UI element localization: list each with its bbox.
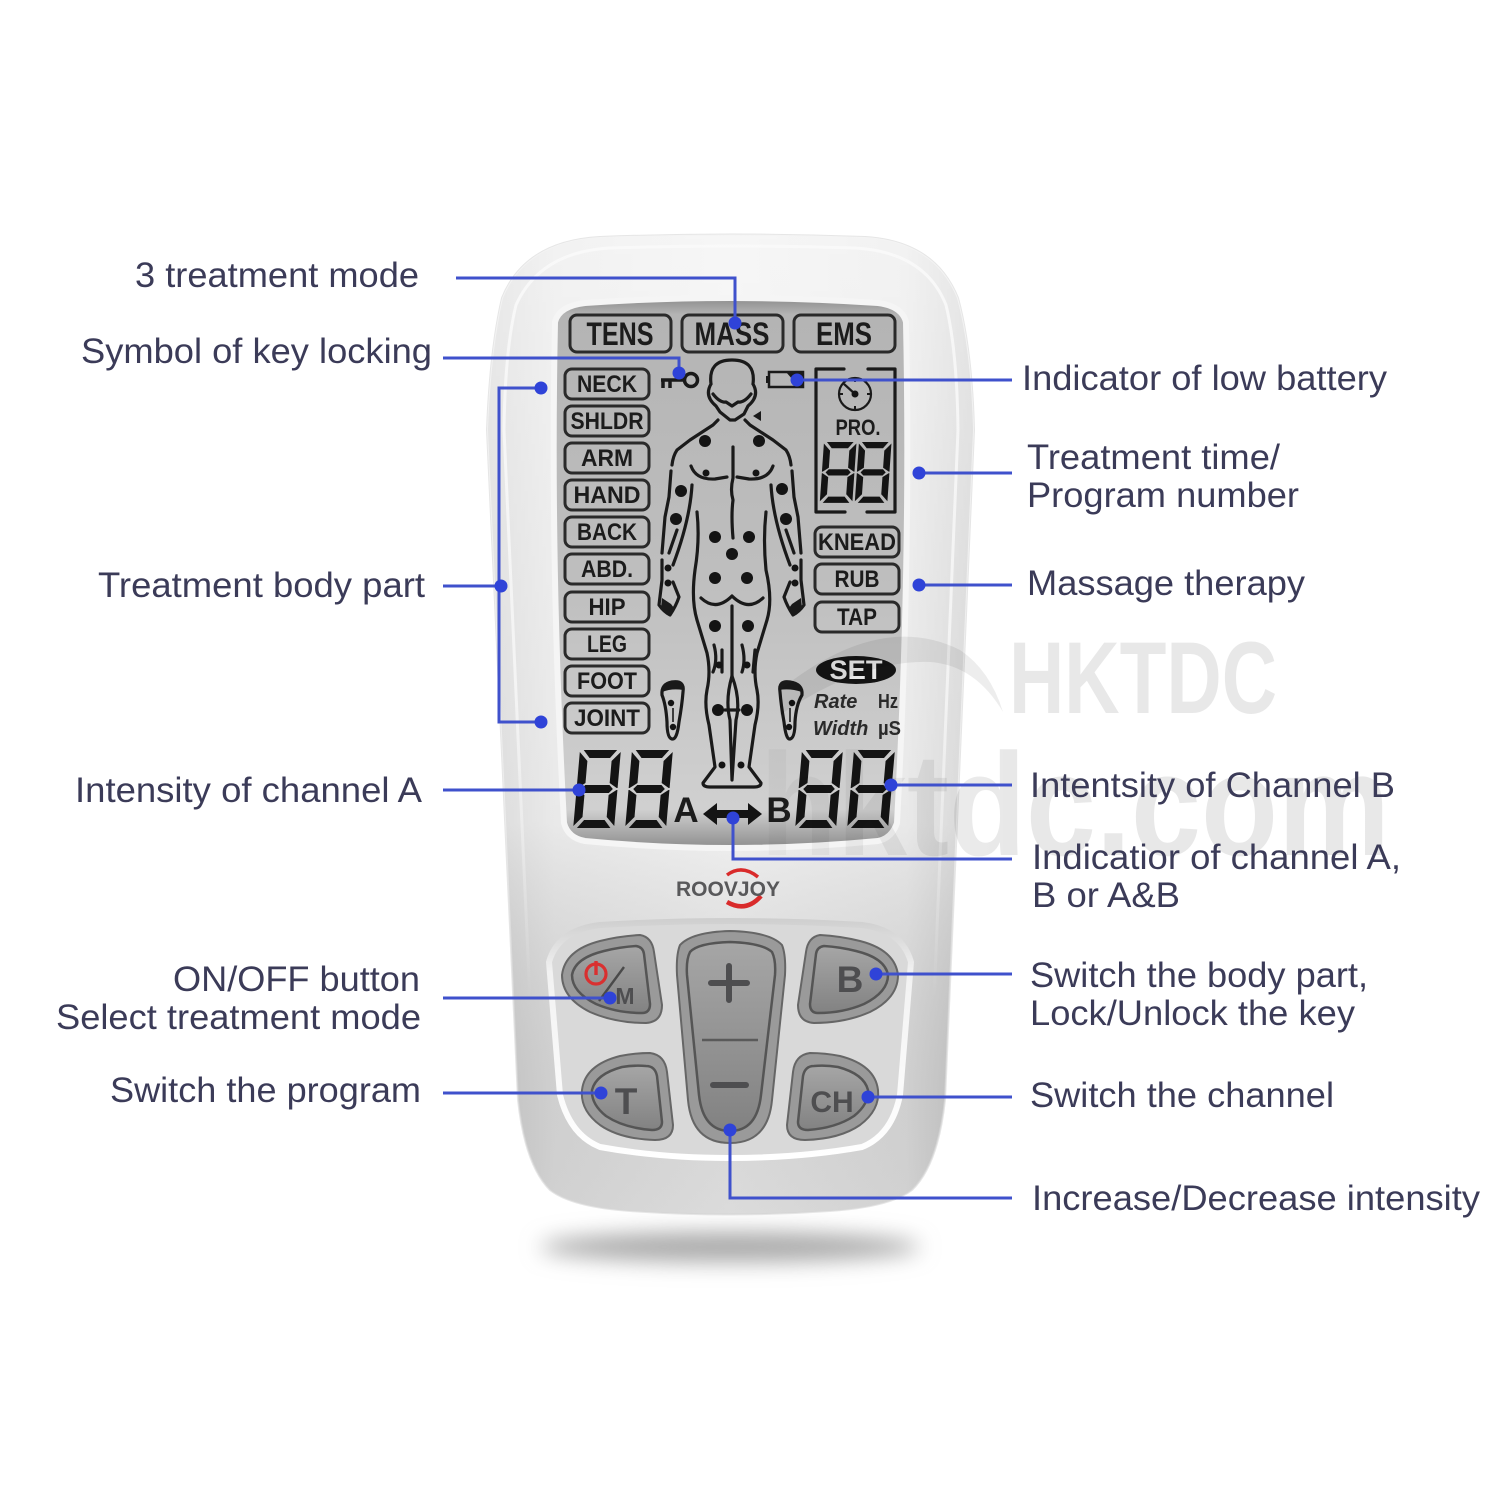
rate and width units: µS: [878, 718, 901, 740]
leader: body part bracket: [443, 382, 548, 728]
body part list: ABD.: [581, 556, 633, 583]
leader: channel indicator: [726, 812, 1012, 859]
leader: on off: [443, 992, 616, 1004]
button: CH: CH: [810, 1086, 854, 1119]
electrode dots: [664, 435, 798, 768]
massage list: KNEAD: [818, 529, 896, 556]
leader: body part button: [870, 968, 1012, 980]
button: power and mode: M: [615, 983, 635, 1009]
rate and width units: Hz: [878, 691, 898, 713]
label: low battery: Indicator of low battery: [1022, 359, 1388, 398]
brand logo: ROOVJOY: [676, 878, 780, 901]
icon: right foot: [779, 682, 802, 739]
mode boxes: MASS: [694, 316, 770, 352]
label: channel indicator: Indicatior of channel A,: [1032, 838, 1401, 877]
label: on off and select mode: ON/OFF button: [173, 960, 420, 999]
button: CH: [787, 1053, 878, 1140]
mode boxes: EMS: [816, 316, 872, 352]
leader: key locking: [443, 358, 686, 380]
label: 3 treatment mode: 3 treatment mode: [135, 256, 419, 295]
watermark: hktdc.com: [760, 723, 1390, 886]
button: B: B: [837, 959, 863, 1000]
label: channel indicator: B or A&B: [1032, 876, 1180, 915]
icon: left foot: [662, 682, 683, 739]
label: on off and select mode: Select treatment mode: [56, 998, 421, 1037]
button: power and mode: [562, 935, 662, 1023]
label: intensity of channel B: Intentsity of Channel B: [1030, 766, 1395, 805]
rate and width units: Rate: [814, 691, 857, 713]
button panel: [549, 921, 911, 1158]
channel indicator A arrow B: A: [673, 791, 699, 830]
leader: treatment time: [912, 466, 1012, 480]
timer bracket and clock: [816, 369, 895, 512]
channel B digits: [795, 750, 895, 828]
leader: switch program: [443, 1086, 608, 1100]
body part list: FOOT: [577, 668, 637, 695]
label: treatment time program number: Program number: [1027, 476, 1299, 515]
label: on off and select mode: [56, 960, 421, 1037]
body part list: JOINT: [574, 705, 640, 732]
body part list: HAND: [574, 482, 640, 509]
program digits: [820, 442, 892, 503]
label: switch the program: Switch the program: [110, 1071, 421, 1110]
label: treatment body part: Treatment body part: [98, 566, 425, 605]
timer bracket and clock: PRO.: [836, 415, 880, 440]
channel indicator A arrow B: [673, 791, 792, 830]
body part list: ARM: [581, 445, 633, 472]
watermark: HKTDC: [1009, 621, 1277, 735]
rate and width units: [813, 691, 901, 740]
label: treatment time program number: Treatment time/: [1027, 438, 1280, 477]
brand logo: [676, 870, 780, 906]
SET badge: SET: [830, 655, 883, 685]
label: massage therapy: Massage therapy: [1027, 564, 1306, 603]
massage list: [815, 527, 899, 632]
device body: [487, 234, 974, 1214]
label: switch body part: Switch the body part,: [1030, 956, 1368, 995]
button: T: T: [615, 1081, 638, 1122]
body part list: HIP: [588, 594, 626, 621]
label: switch body part: [1030, 956, 1368, 1033]
SET badge: [816, 655, 896, 685]
body part list: NECK: [577, 371, 638, 398]
label: treatment time program number: [1027, 438, 1299, 515]
label: symbol of key locking: Symbol of key locking: [81, 332, 432, 371]
massage list: RUB: [834, 566, 880, 593]
body part list: [565, 369, 649, 733]
label: switch body part: Lock/Unlock the key: [1030, 994, 1356, 1033]
channel indicator A arrow B: B: [766, 791, 792, 830]
mode boxes: [570, 315, 895, 352]
leader: low battery: [790, 374, 1012, 386]
body part list: BACK: [577, 519, 638, 546]
label: intensity of channel A: Intensity of channel A: [75, 771, 423, 810]
device shadow: [540, 1232, 920, 1262]
label: switch channel: Switch the channel: [1030, 1076, 1334, 1115]
button: B: [798, 935, 898, 1023]
icon: key lock: [661, 374, 698, 388]
body figure: [659, 360, 804, 787]
icon: battery: [766, 372, 803, 387]
LCD screen: [554, 298, 907, 848]
label: increase decrease intensity: Increase/Decrease intensity: [1032, 1179, 1481, 1218]
leader: channel button: [862, 1090, 1012, 1104]
leader: intensity buttons: [724, 1124, 1012, 1198]
leader: massage therapy: [912, 578, 1012, 592]
label: channel indicator: [1032, 838, 1401, 915]
leader: intensity A: [443, 784, 586, 796]
channel A digits: [573, 750, 673, 828]
button: T: [582, 1053, 673, 1140]
mode boxes: TENS: [586, 316, 654, 352]
rate and width units: Width: [813, 718, 868, 740]
body part list: SHLDR: [570, 408, 644, 435]
leader: treatment mode: [456, 278, 742, 330]
watermark: [760, 621, 1390, 886]
leader: intensity B: [884, 778, 1012, 792]
massage list: TAP: [837, 604, 877, 631]
button: plus minus: [677, 931, 785, 1143]
body part list: LEG: [587, 631, 627, 658]
